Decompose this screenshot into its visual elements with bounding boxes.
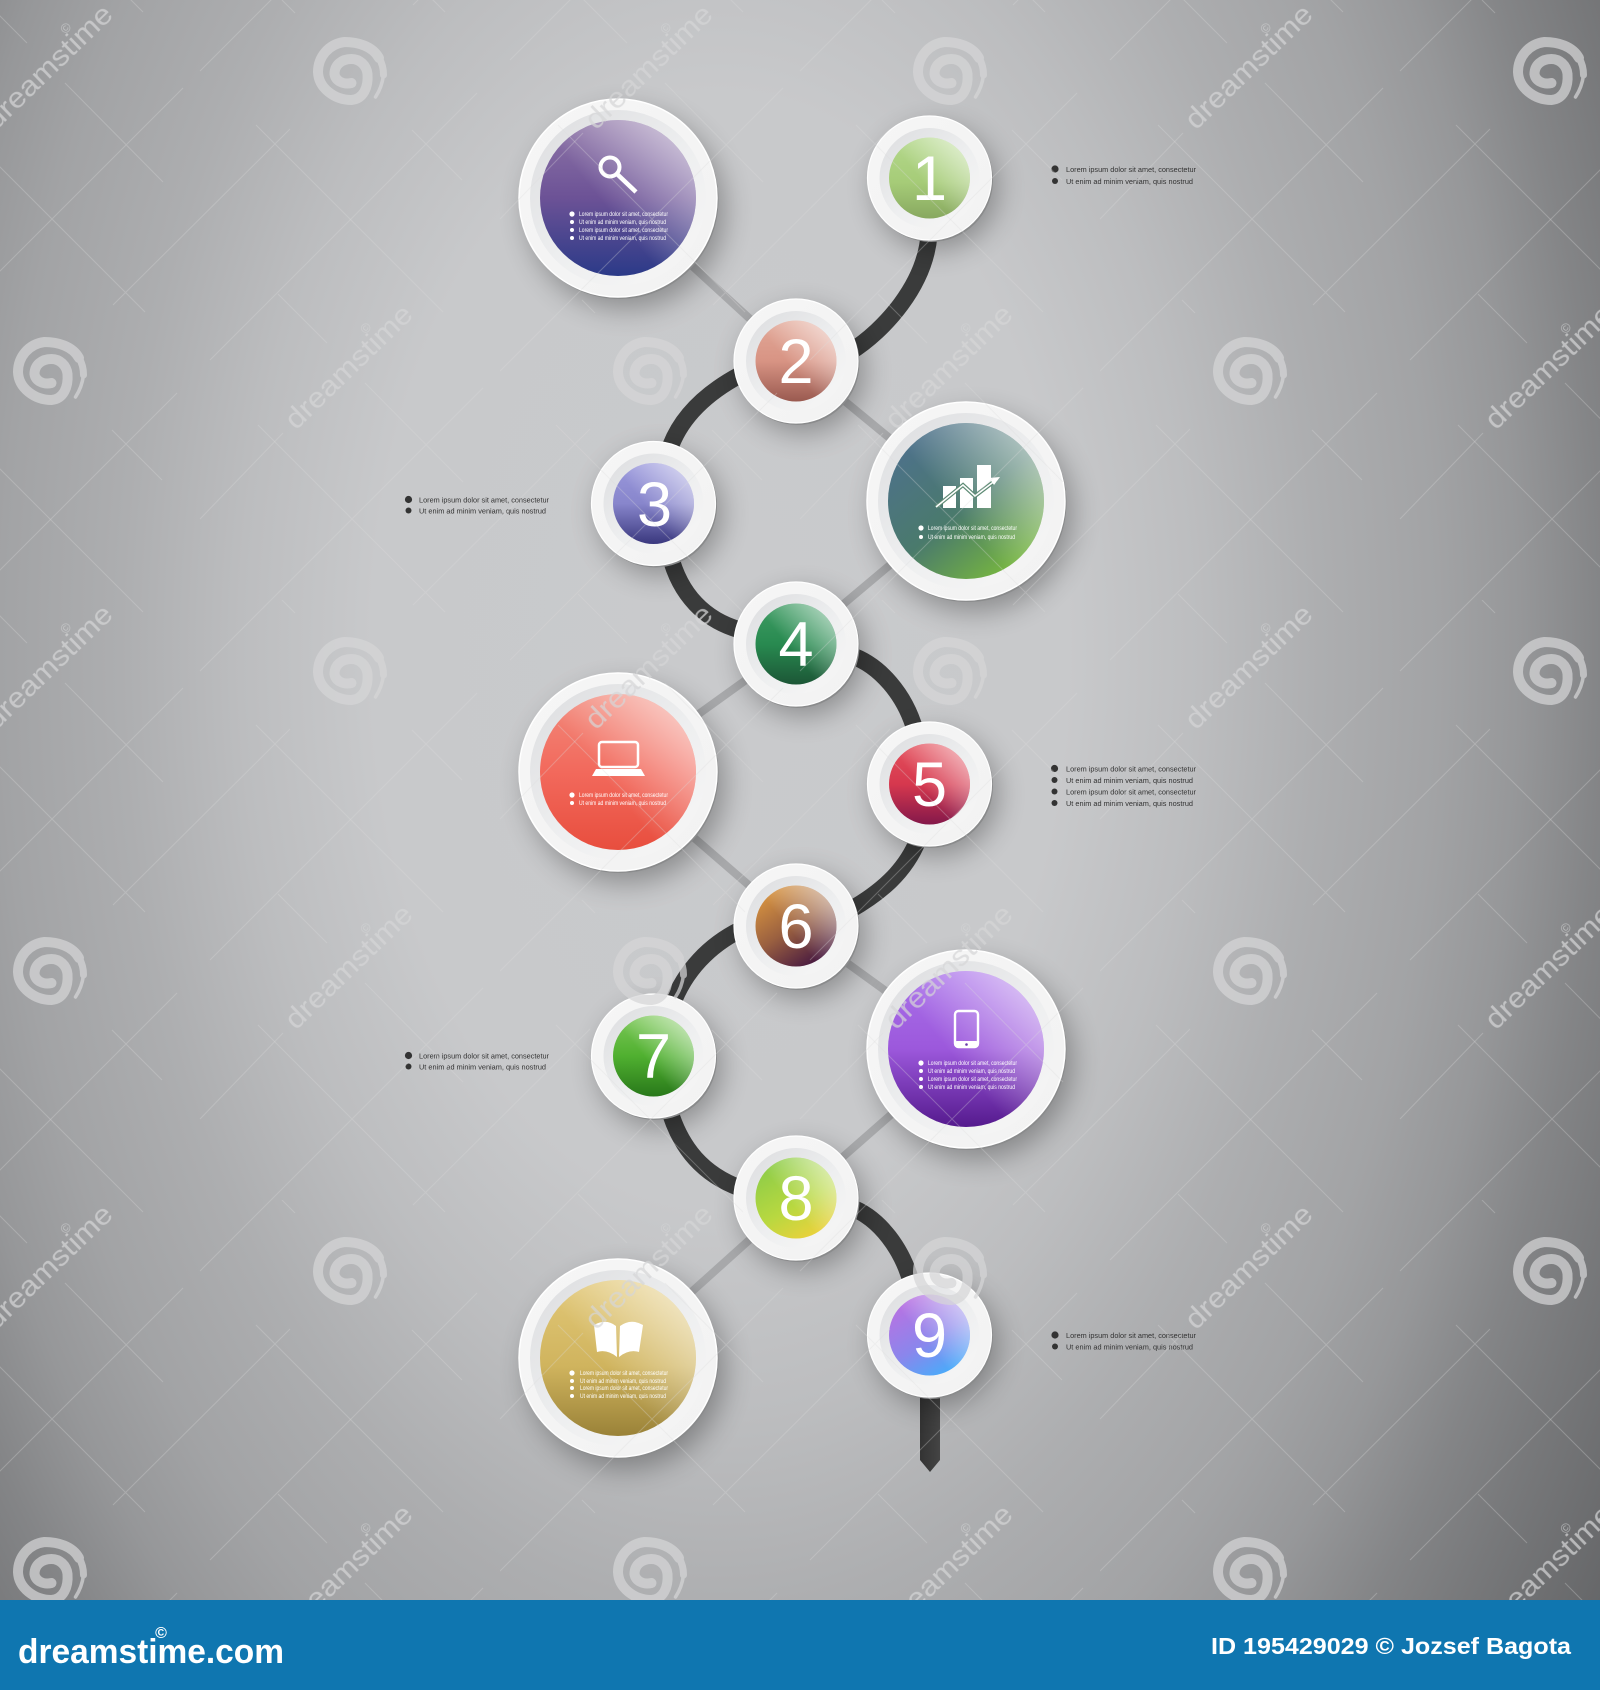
text list: Ut enim ad minim veniam, quis nostrud [580, 1394, 666, 1400]
step 9 [868, 1273, 998, 1407]
text: © [57, 19, 75, 37]
step 6 [734, 864, 865, 998]
text: dreamstime [879, 898, 1019, 1036]
text: dreamstime [279, 298, 419, 436]
text: © [657, 619, 675, 637]
step 4 [734, 582, 865, 716]
side text: step 3: Lorem ipsum dolor sit amet, consectetur [419, 496, 549, 504]
side text: step 7 [405, 1052, 549, 1072]
step 8: 8 [778, 1164, 814, 1234]
text list: Ut enim ad minim veniam, quis nostrud [580, 1379, 666, 1385]
big circle: laptop [519, 673, 725, 883]
text list [569, 1370, 668, 1400]
text: © [57, 619, 75, 637]
text: © [957, 1519, 975, 1537]
step 6: 6 [778, 892, 814, 962]
grey connector lines [618, 198, 966, 1358]
text list: Lorem ipsum dolor sit amet, consectetur [579, 793, 668, 799]
text: dreamstime [279, 1498, 419, 1636]
step 9: 9 [912, 1301, 947, 1371]
icon: magnifier [600, 158, 636, 192]
step 5: 5 [912, 750, 947, 820]
big circle: chart [867, 402, 1073, 612]
text list: Lorem ipsum dolor sit amet, consectetur [928, 1077, 1017, 1083]
icon: open book [594, 1322, 643, 1357]
text: dreamstime [1179, 0, 1319, 136]
big circle: book [519, 1259, 725, 1469]
side text: step 3 [405, 496, 549, 516]
text list: Ut enim ad minim veniam, quis nostrud [579, 236, 666, 242]
step 4: 4 [778, 610, 814, 680]
text: dreamstime [879, 1498, 1019, 1636]
text list [918, 1060, 1017, 1091]
text: © [957, 919, 975, 937]
text list: Lorem ipsum dolor sit amet, consectetur [928, 1061, 1017, 1067]
step 8 [734, 1136, 865, 1270]
text: dreamstime [579, 1198, 719, 1336]
text list: Ut enim ad minim veniam, quis nostrud [579, 801, 666, 807]
text: dreamstime [579, 0, 719, 136]
text list: Lorem ipsum dolor sit amet, consectetur [579, 228, 668, 234]
icon: phone [955, 1011, 978, 1047]
dark winding path [668, 235, 929, 1285]
arrow tail [920, 1390, 940, 1472]
text list [918, 525, 1017, 541]
icon: laptop [592, 742, 645, 776]
text: © [1257, 1219, 1275, 1237]
text list: Ut enim ad minim veniam, quis nostrud [928, 535, 1015, 541]
text: © [1557, 319, 1575, 337]
text: © [357, 919, 375, 937]
big circle: phone [867, 950, 1073, 1160]
text: © [657, 1219, 675, 1237]
side text: step 5: Ut enim ad minim veniam, quis nostrud [1066, 776, 1193, 785]
side text: step 9: Ut enim ad minim veniam, quis nostrud [1066, 1342, 1193, 1352]
text list: Ut enim ad minim veniam, quis nostrud [579, 220, 666, 226]
step 2 [734, 299, 865, 433]
step 7 [592, 994, 722, 1128]
step 1: 1 [912, 144, 947, 214]
text list: Lorem ipsum dolor sit amet, consectetur [928, 526, 1017, 532]
text list: Lorem ipsum dolor sit amet, consectetur [580, 1386, 668, 1392]
step 3 [592, 442, 722, 575]
text: © [1257, 619, 1275, 637]
step 3: 3 [637, 470, 672, 540]
text: © [957, 319, 975, 337]
text: dreamstime [279, 898, 419, 1036]
step 7: 7 [636, 1022, 671, 1092]
text: dreamstime [579, 598, 719, 736]
side text: step 1: Ut enim ad minim veniam, quis nostrud [1066, 177, 1193, 186]
text list: Ut enim ad minim veniam, quis nostrud [928, 1069, 1015, 1075]
text list: Ut enim ad minim veniam, quis nostrud [928, 1085, 1015, 1091]
text: dreamstime [1179, 1198, 1319, 1336]
side text: step 3: Ut enim ad minim veniam, quis nostrud [419, 506, 546, 516]
side text: step 5: Lorem ipsum dolor sit amet, consectetur [1066, 764, 1196, 774]
side text: step 5 [1051, 764, 1196, 808]
side text: step 9 [1051, 1331, 1196, 1352]
side text: step 9: Lorem ipsum dolor sit amet, consectetur [1066, 1331, 1196, 1340]
text: © [1557, 1519, 1575, 1537]
text list [569, 211, 668, 242]
footer logo: dreamstime.com [18, 1633, 284, 1671]
text: © [657, 19, 675, 37]
step 5 [868, 722, 998, 856]
side text: step 5: Ut enim ad minim veniam, quis nostrud [1066, 799, 1193, 808]
footer credit: ID 195429029 © Jozsef Bagota [1211, 1633, 1571, 1659]
side text: step 1 [1051, 165, 1196, 186]
side text: step 1: Lorem ipsum dolor sit amet, consectetur [1066, 165, 1196, 174]
text list: Lorem ipsum dolor sit amet, consectetur [580, 1371, 668, 1377]
footer bar [0, 1600, 1600, 1690]
text: © [57, 1219, 75, 1237]
text list: Lorem ipsum dolor sit amet, consectetur [579, 212, 668, 218]
big circle: search [519, 99, 725, 309]
text: © [1257, 19, 1275, 37]
text: dreamstime [879, 298, 1019, 436]
text: © [357, 1519, 375, 1537]
icon: bar chart with arrow [936, 465, 1000, 508]
side text: step 7: Ut enim ad minim veniam, quis nostrud [419, 1062, 546, 1072]
text list [569, 792, 668, 807]
side text: step 5: Lorem ipsum dolor sit amet, consectetur [1066, 788, 1196, 796]
footer logo: © [155, 1625, 167, 1642]
text: © [357, 319, 375, 337]
text: dreamstime [1179, 598, 1319, 736]
step 1 [868, 116, 998, 250]
side text: step 7: Lorem ipsum dolor sit amet, consectetur [419, 1052, 549, 1060]
step 2: 2 [778, 327, 814, 397]
text: © [1557, 919, 1575, 937]
